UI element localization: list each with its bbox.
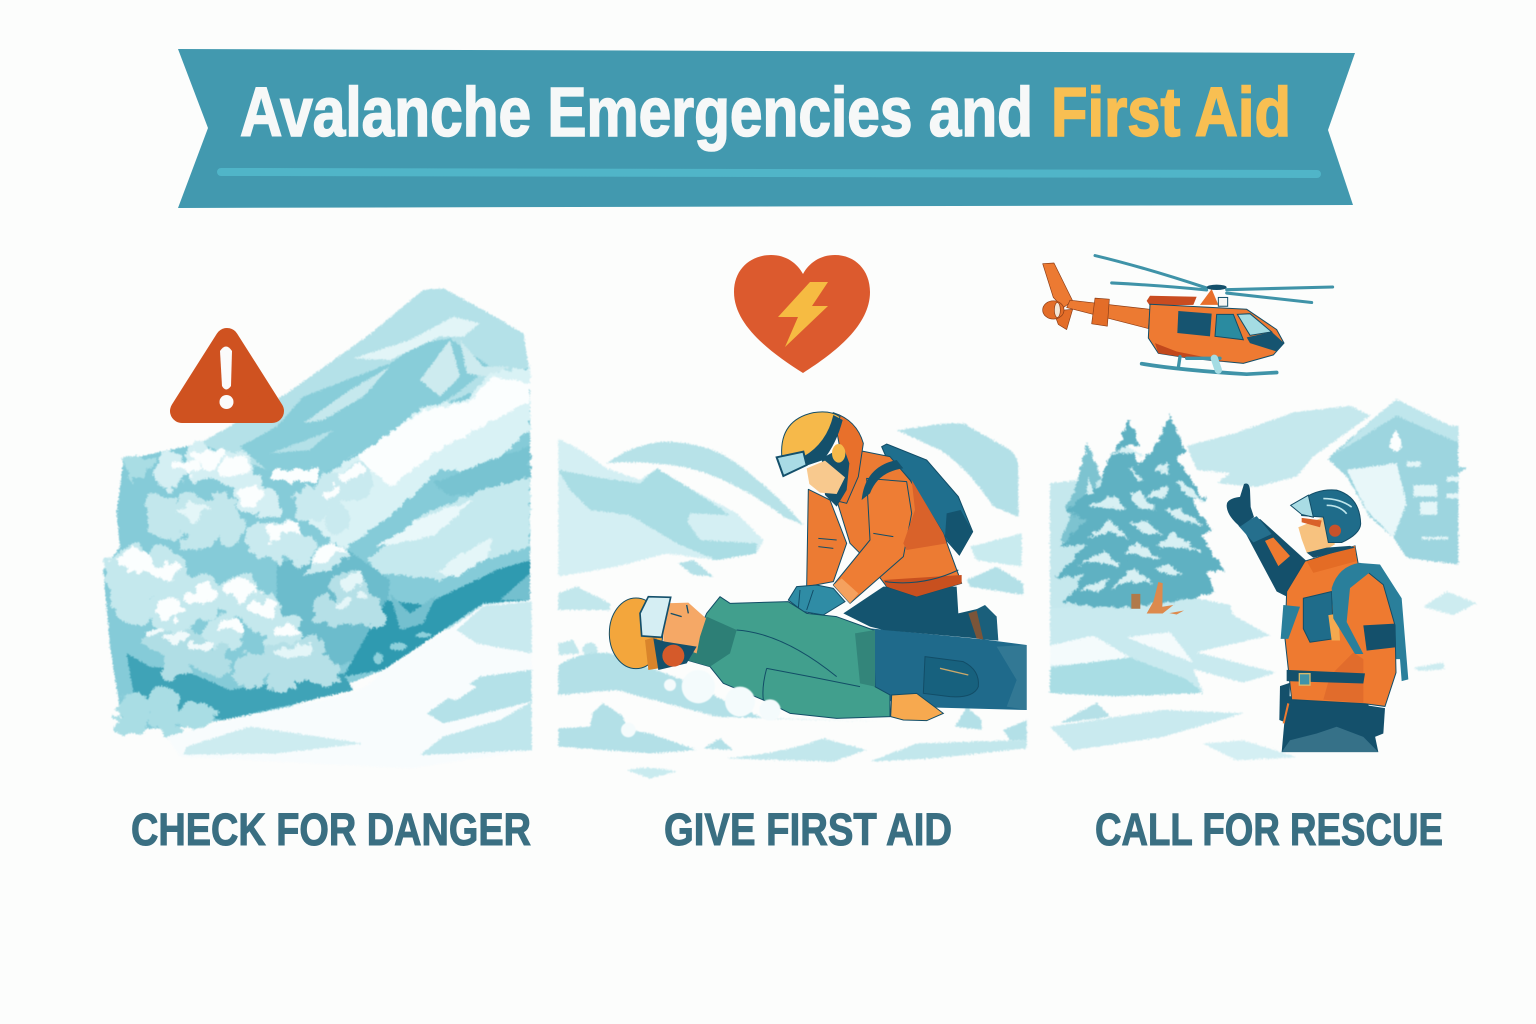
title text: Avalanche Emergencies and (240, 73, 1033, 151)
illustration: avalanche (103, 288, 532, 768)
signalling rescuer (1227, 484, 1408, 752)
title text: First Aid (1051, 73, 1291, 151)
fuselage (1147, 285, 1284, 363)
cloud: top left (123, 443, 280, 520)
chalet (1328, 400, 1467, 564)
cloud: small rock (303, 545, 352, 575)
panel: check for danger (103, 288, 532, 855)
victim jacket (687, 597, 890, 718)
cloud: front left (103, 547, 302, 653)
backpack (1332, 563, 1408, 681)
rescuer head (777, 412, 863, 507)
cloud: upper centre (294, 465, 375, 531)
hood (833, 413, 863, 503)
face (807, 461, 845, 494)
raised arm (1227, 484, 1307, 598)
avalanche body (103, 367, 530, 730)
panel: call for rescue (1043, 256, 1477, 855)
snow on trees (1078, 446, 1205, 592)
illustration: cpr scene (558, 412, 1027, 778)
lower glove (1361, 705, 1385, 738)
pine trees (1055, 414, 1225, 608)
rescuer glove (788, 585, 845, 615)
cloud: bottom left (113, 686, 213, 737)
dark shadow lower left (127, 653, 353, 720)
trousers (1282, 696, 1378, 752)
icon: warning triangle (182, 340, 272, 411)
snow dust at feet (1282, 727, 1378, 752)
snowy ground (1050, 592, 1477, 761)
balaclava (822, 447, 849, 507)
cloud: low left (148, 628, 228, 678)
tree trunks (1131, 582, 1184, 615)
snowy backdrop (558, 423, 1027, 778)
banner ribbon (178, 49, 1355, 208)
mountain (200, 288, 530, 647)
tail (1043, 263, 1150, 330)
clouds (103, 443, 384, 737)
victim legs (867, 628, 1027, 710)
label: give first aid: GIVE FIRST AID (664, 804, 952, 855)
rescuer backpack (882, 444, 973, 555)
mid shadow (277, 547, 390, 673)
snow chunks (621, 670, 781, 737)
illustration: helicopter (1043, 256, 1333, 374)
cloud: centre (244, 520, 315, 562)
skids (1142, 357, 1277, 374)
icon: heart with lightning (734, 255, 870, 373)
panel: give first aid (558, 255, 1027, 855)
jacket (1285, 546, 1396, 706)
head (1298, 517, 1335, 553)
cloud: lower centre (313, 572, 384, 630)
rotor blades (1095, 256, 1333, 303)
victim head (609, 597, 706, 670)
banner underline (221, 172, 1317, 174)
foreground snow (167, 600, 532, 768)
label: call for rescue: CALL FOR RESCUE (1095, 804, 1443, 855)
rescuer jacket (807, 450, 962, 603)
belt (1287, 670, 1365, 683)
rescuer trousers and boot (843, 587, 998, 641)
cloud: middle left (143, 490, 246, 550)
title banner (178, 49, 1355, 208)
label: check for danger: CHECK FOR DANGER (131, 804, 531, 855)
snowy backdrop (1050, 400, 1477, 761)
illustration: rescuer signalling (1050, 400, 1477, 761)
goggles (777, 452, 807, 476)
cloud: low centre (232, 638, 336, 693)
upper snow flow (297, 367, 530, 580)
helmet (782, 412, 840, 458)
victim hand (891, 693, 943, 721)
dark shadow under slope (343, 560, 530, 677)
